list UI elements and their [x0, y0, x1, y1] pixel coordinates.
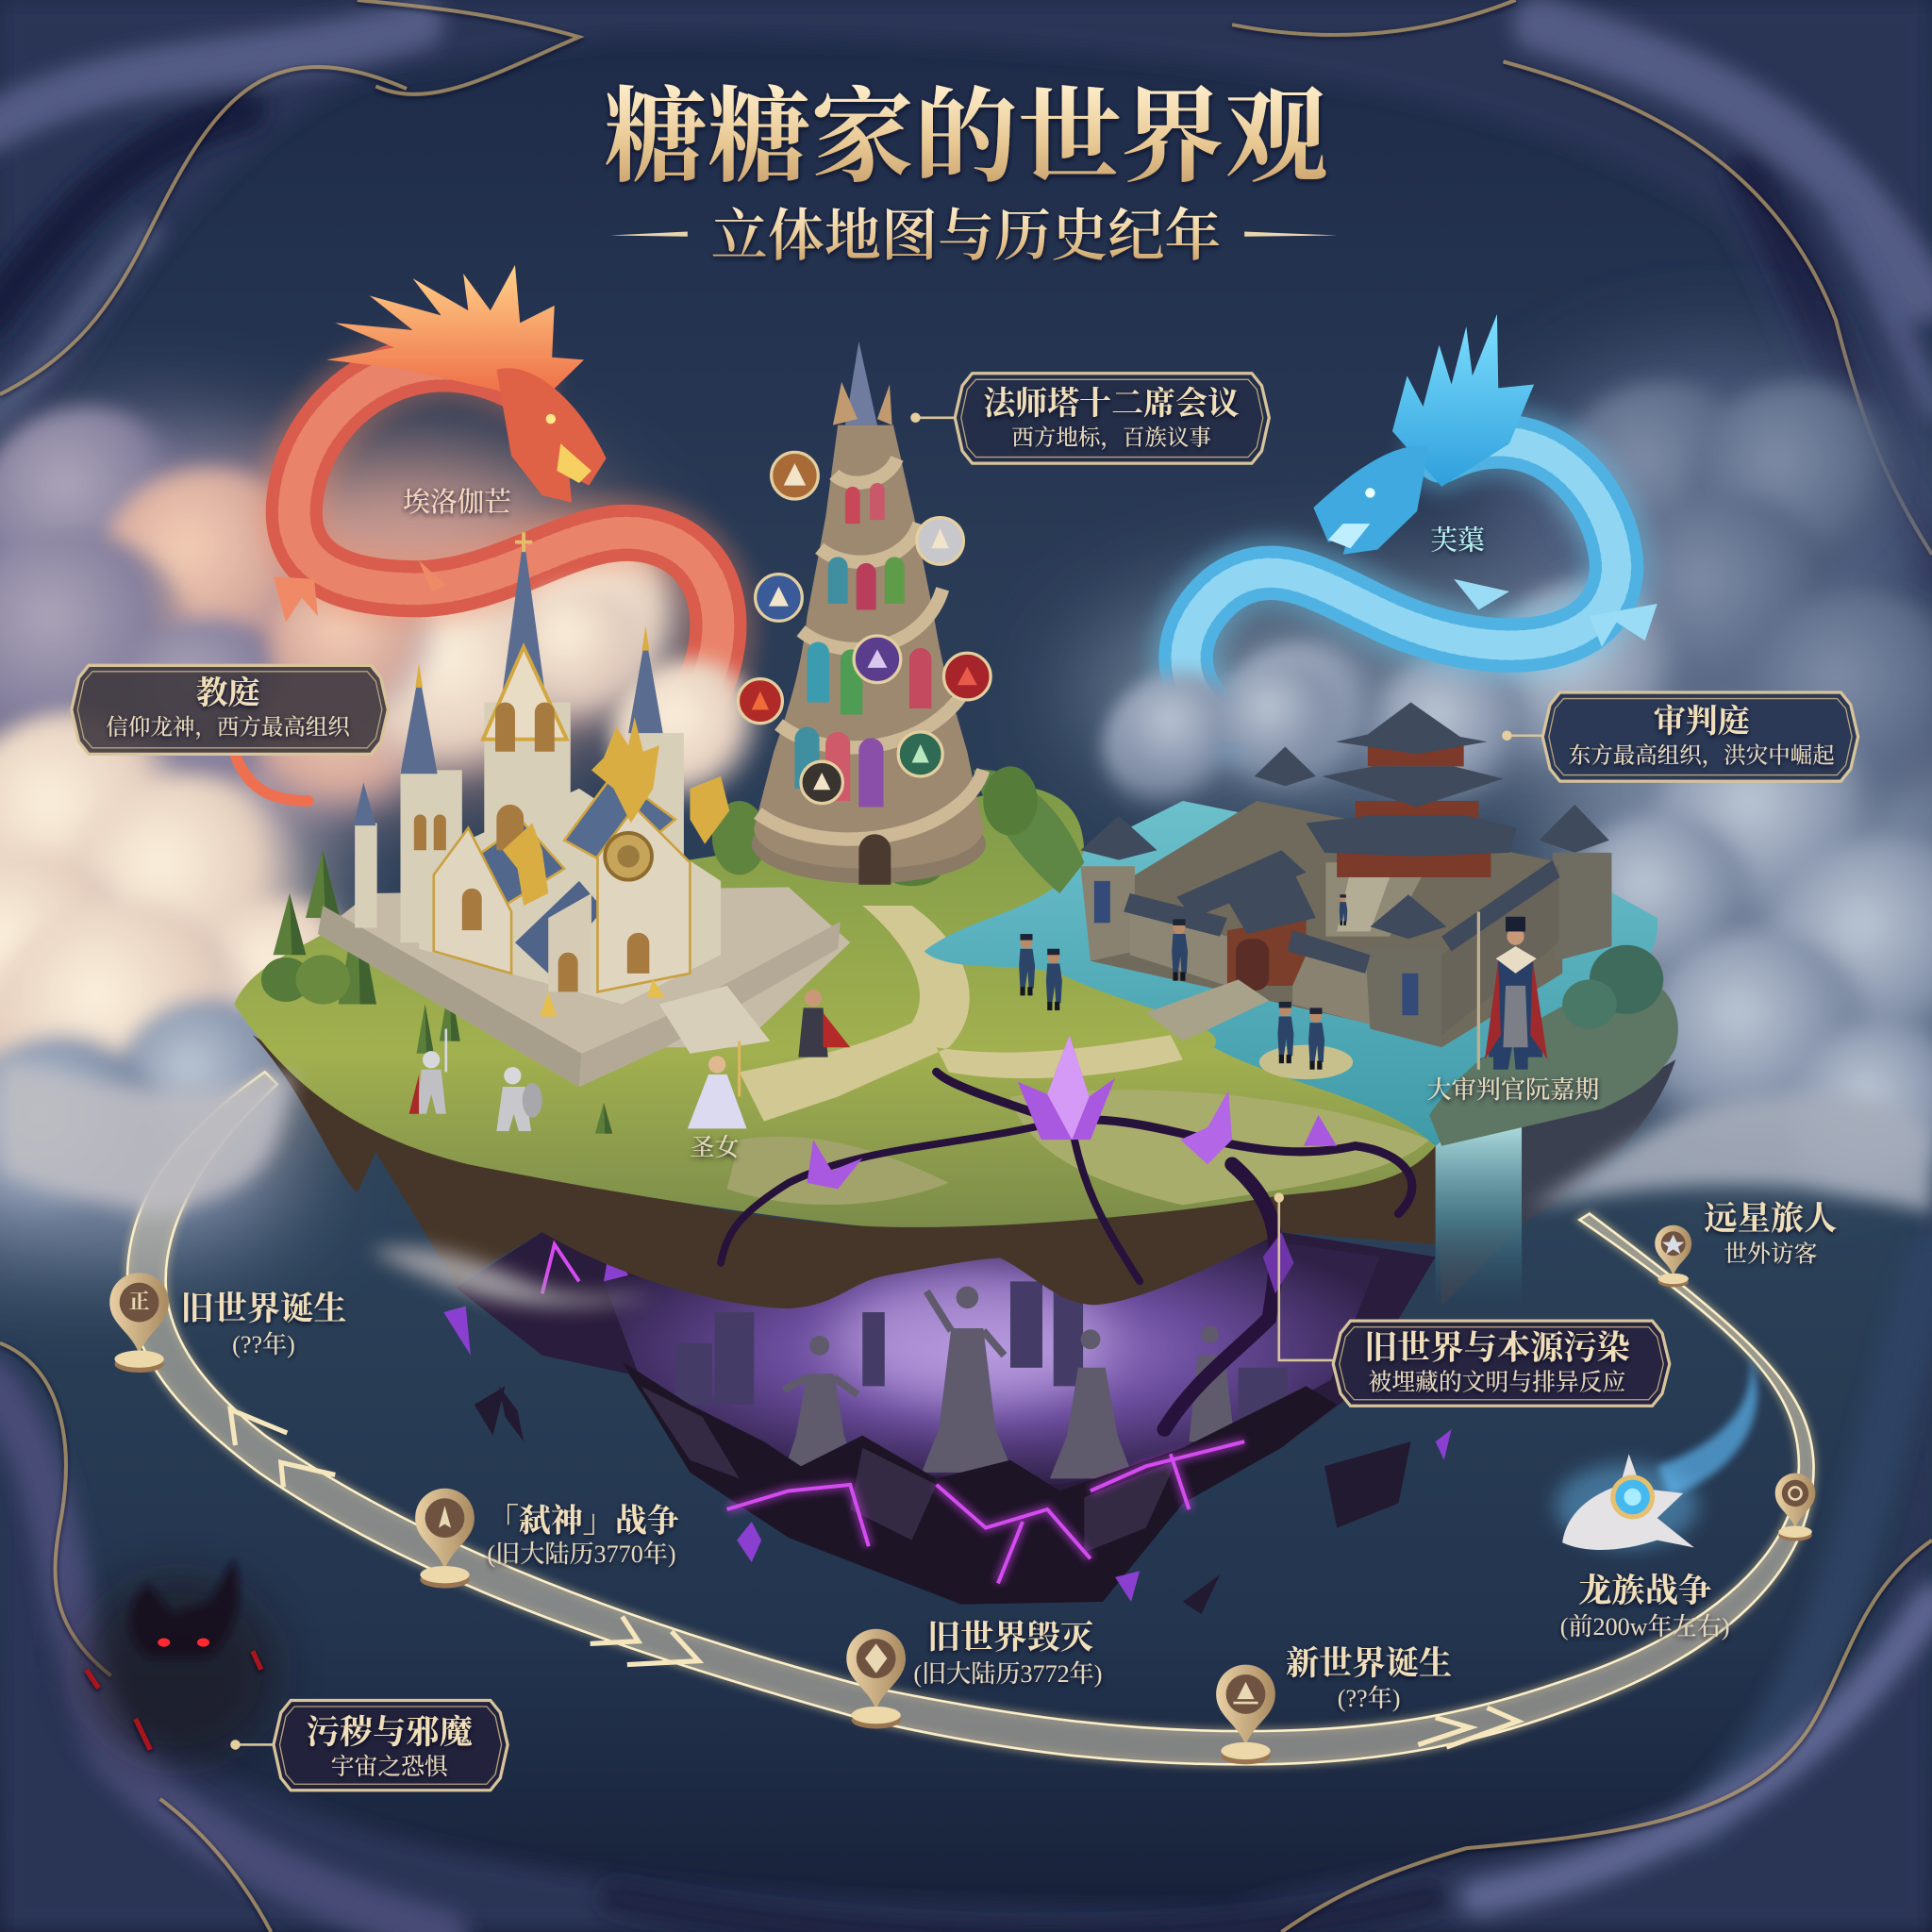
back clouds	[0, 358, 1932, 1257]
front clouds	[0, 1059, 1932, 1306]
pin: new world birth	[1216, 1665, 1275, 1764]
dragon: Fuqu (blue)	[1186, 314, 1657, 727]
label: Fuqu: 芙蕖	[1430, 526, 1485, 557]
event: old world destruction: (旧大陆历3772年)	[913, 1660, 1102, 1688]
starship	[1555, 1356, 1757, 1550]
floating shards	[475, 1386, 1411, 1614]
description: 信仰龙神，西方最高组织	[106, 714, 351, 740]
event: new world birth	[1286, 1645, 1452, 1712]
floating island	[234, 341, 1678, 1614]
dragon: Eluogamang (red)	[234, 265, 720, 801]
pin: godslayer war	[415, 1489, 475, 1589]
pin: old world birth: 正	[128, 1290, 150, 1313]
timeline labels	[180, 1201, 1837, 1712]
faction emblems	[738, 452, 991, 804]
event: far star traveller	[1704, 1201, 1837, 1267]
heading: 教庭	[196, 675, 260, 711]
description: 被埋藏的文明与排异反应	[1369, 1369, 1625, 1395]
purple corruption vines	[721, 1072, 1412, 1429]
event: old world birth	[180, 1291, 347, 1358]
figures: west	[409, 990, 850, 1131]
event: godslayer war	[487, 1504, 679, 1568]
crystals	[808, 1035, 1337, 1293]
event: old world destruction	[913, 1620, 1102, 1688]
description: 东方最高组织，洪灾中崛起	[1569, 742, 1835, 768]
gold dragon statues	[503, 717, 729, 906]
label: Saintess: 圣女	[690, 1134, 740, 1161]
figure labels	[690, 1076, 1599, 1161]
event: godslayer war: 「弑神」战争	[487, 1504, 679, 1540]
event: far star traveller: 世外访客	[1724, 1241, 1818, 1267]
statues	[784, 1287, 1235, 1478]
panel: Mage tower council	[910, 374, 1269, 463]
pin: old world birth	[109, 1273, 169, 1373]
underground: buried old world	[443, 1217, 1493, 1614]
description: 西方地标，百族议事	[1011, 425, 1211, 451]
pins on timeline	[109, 1225, 1815, 1764]
label: Grand Inquisitor Ruan Jiaqi: 大审判官阮嘉期	[1427, 1076, 1599, 1104]
moat water	[924, 801, 1657, 1146]
trees	[261, 766, 1663, 1134]
figures: east guards	[1019, 894, 1347, 1070]
panel: Old world and source corruption	[1274, 1192, 1670, 1406]
heading: 污秽与邪魔	[307, 1714, 473, 1751]
earth crust cliff	[253, 1035, 1436, 1308]
panel: Church	[72, 665, 388, 754]
event: new world birth: 新世界诞生	[1286, 1645, 1452, 1682]
figure: Grand Inquisitor	[1478, 912, 1547, 1070]
event: dragon war	[1560, 1573, 1730, 1641]
event: old world destruction: 旧世界毁灭	[927, 1620, 1093, 1657]
pin: old world destruction	[846, 1629, 906, 1728]
event: dragon war: 龙族战争	[1578, 1573, 1711, 1609]
panel: Filth and demons	[230, 1700, 508, 1790]
heading: 审判庭	[1654, 704, 1750, 740]
surface	[234, 789, 1436, 1227]
clouds over dragon tails	[511, 585, 1349, 820]
demon	[80, 1558, 277, 1762]
event: old world birth: 旧世界诞生	[180, 1291, 347, 1327]
timeline ring	[127, 1072, 1814, 1764]
pin: dragon war	[1775, 1474, 1815, 1541]
pin: far star traveller	[1655, 1225, 1691, 1287]
event: godslayer war: (旧大陆历3770年)	[487, 1541, 676, 1568]
event: far star traveller: 远星旅人	[1704, 1201, 1837, 1238]
fortress of the tribunal	[1080, 702, 1611, 1047]
label: Eluogamang: 埃洛伽芒	[403, 488, 511, 518]
dirt path	[740, 906, 1183, 1122]
event: dragon war: (前200w年左右)	[1560, 1613, 1730, 1641]
title: 糖糖家的世界观	[604, 80, 1328, 195]
description: 宇宙之恐惧	[331, 1754, 449, 1780]
event: new world birth: (??年)	[1338, 1685, 1400, 1712]
cathedral	[318, 532, 850, 1087]
heading: 法师塔十二席会议	[983, 386, 1240, 422]
cracked lower rock	[623, 1361, 1337, 1605]
panel: Tribunal	[1502, 692, 1858, 781]
event: old world birth: (??年)	[232, 1331, 295, 1358]
subtitle: 立体地图与历史纪年	[711, 204, 1221, 267]
mage tower	[738, 341, 991, 885]
heading: 旧世界与本源污染	[1364, 1329, 1630, 1367]
